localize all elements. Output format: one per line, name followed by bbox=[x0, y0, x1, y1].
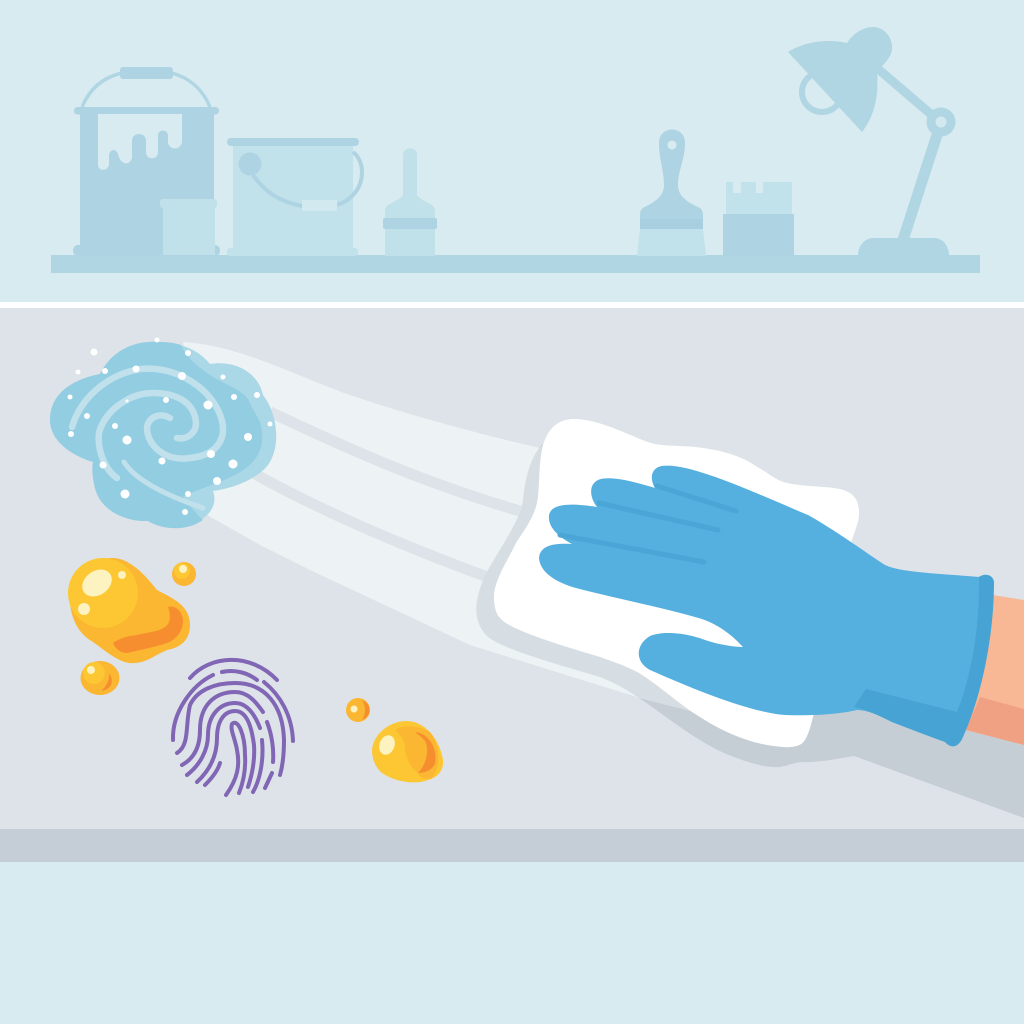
paint block bbox=[723, 182, 794, 256]
workbench surface bbox=[0, 302, 1024, 862]
fingerprint bbox=[173, 660, 293, 795]
foam cloud bbox=[50, 338, 276, 528]
large paint can bbox=[73, 67, 220, 256]
blue glove bbox=[539, 466, 994, 746]
oil blob large bbox=[68, 558, 190, 663]
shelf with silhouettes bbox=[51, 27, 980, 273]
oil blob right bbox=[372, 721, 443, 782]
oil drop center bbox=[346, 698, 370, 722]
arm bbox=[966, 595, 1024, 745]
wipe trail bbox=[183, 342, 640, 698]
medium paint bucket bbox=[227, 138, 362, 256]
small brush left bbox=[383, 148, 437, 256]
brush right bbox=[637, 130, 706, 256]
desk lamp bbox=[788, 27, 956, 256]
oil drop small top bbox=[172, 562, 196, 586]
oil drop left bbox=[80, 661, 120, 695]
wipe cloth bbox=[476, 419, 859, 747]
table shadow of hand bbox=[639, 690, 1024, 818]
